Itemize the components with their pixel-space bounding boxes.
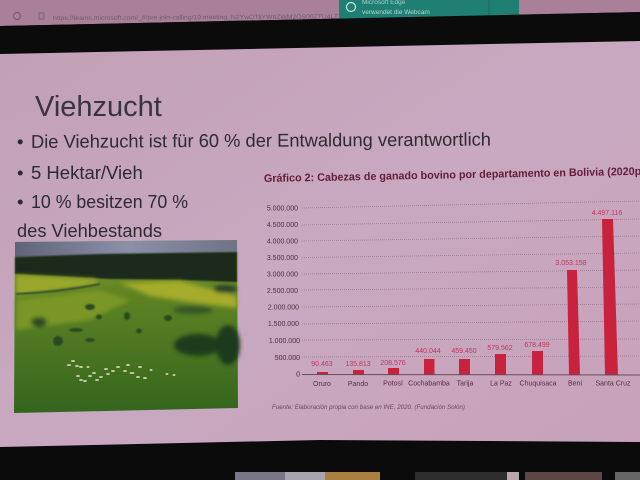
bullet: ownership: •	[17, 191, 23, 212]
bar chart: cattle by department	[267, 201, 640, 388]
photo: cattle pasture by forest	[14, 240, 240, 413]
category labels: Chuquisaca	[520, 380, 557, 388]
y axis labels: 500.000	[275, 355, 300, 362]
tree clumps	[174, 334, 222, 356]
value labels: 90.463	[311, 361, 333, 368]
y axis labels: 4.500.000	[267, 222, 298, 229]
value labels: 3.053.158	[555, 260, 587, 267]
y axis labels: 4.000.000	[267, 238, 298, 246]
bullet: deforestation: Die Viehzucht ist für 60 % der Entwaldung verantwortlich	[31, 129, 491, 152]
category labels	[313, 380, 631, 388]
webcam notification: verwendet die Webcam	[362, 9, 430, 16]
category labels: Oruro	[313, 381, 331, 388]
category labels: Cochabamba	[408, 380, 450, 388]
black monitor band top	[0, 12, 640, 54]
value labels: 4.497.116	[592, 210, 622, 217]
y axis labels: 5.000.000	[267, 206, 298, 212]
y axis labels: 1.500.000	[268, 321, 299, 328]
y axis labels: 3.500.000	[267, 255, 298, 262]
category labels: Pando	[348, 381, 368, 388]
y axis labels: 0	[296, 372, 300, 378]
y axis labels	[267, 206, 300, 378]
value labels: 440.044	[415, 348, 441, 355]
sky	[15, 240, 237, 257]
grid lines	[302, 201, 640, 357]
bullet: ownership: 10 % besitzen 70 %	[31, 191, 188, 212]
value labels: 459.450	[451, 348, 477, 355]
category labels: Beni	[568, 380, 582, 388]
cattle herd	[67, 360, 176, 382]
webcam notification	[339, 0, 519, 24]
category labels: Santa Cruz	[595, 380, 631, 388]
y axis labels: 2.000.000	[268, 304, 299, 312]
browser address bar	[0, 0, 640, 26]
slide title: Viehzucht	[35, 91, 162, 123]
y axis labels: 3.000.000	[267, 272, 298, 278]
category labels: La Paz	[490, 380, 512, 388]
value labels: 678.499	[524, 342, 550, 349]
category labels: Tarija	[457, 380, 473, 388]
bars	[317, 219, 618, 375]
category labels: Potosí	[383, 380, 403, 388]
bullet: hectares: •	[17, 162, 23, 183]
browser address bar: https://teams.microsoft.com/_#/pre-join-calling/19:meeting_N2YwOTljYWItZWM2OS00ZTU4LT	[53, 14, 338, 22]
chart source note: Fuente: Elaboración propia con base en INE, 2020. (Fundación Solón)	[272, 404, 465, 411]
bullet: hectares: 5 Hektar/Vieh	[31, 162, 143, 183]
value labels	[311, 210, 622, 368]
bullet list	[17, 129, 491, 241]
value labels: 579.562	[487, 345, 513, 352]
y axis labels: 1.000.000	[269, 338, 300, 345]
bullet: deforestation: •	[17, 131, 24, 152]
value labels: 208.576	[380, 360, 406, 367]
x axis	[302, 374, 640, 376]
forest	[15, 252, 237, 282]
video thumbnails strip	[235, 472, 640, 480]
y axis labels: 2.500.000	[267, 288, 298, 295]
bullet continuation: des Viehbestands	[17, 220, 162, 241]
value labels: 135.813	[345, 361, 371, 368]
yellow fields	[16, 275, 100, 296]
